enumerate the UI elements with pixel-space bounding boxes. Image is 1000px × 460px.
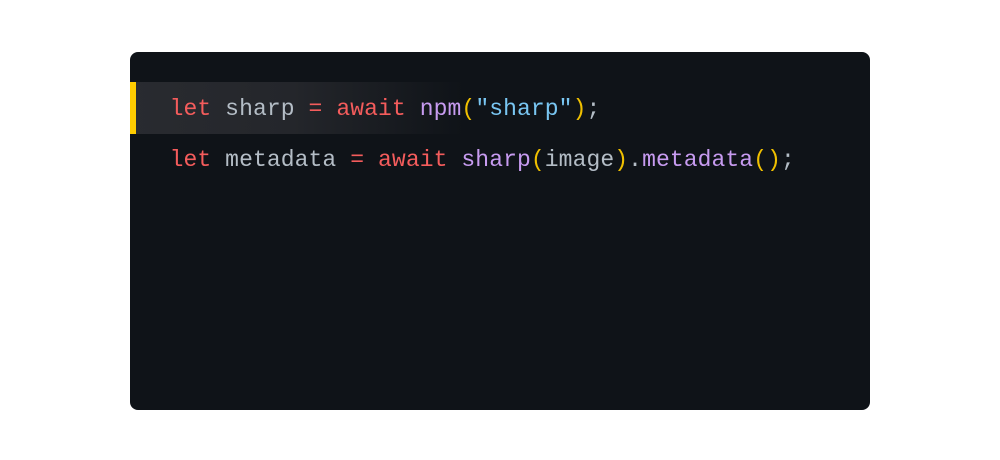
code line 2: let metadata = await sharp(image).metadata(); xyxy=(170,147,795,173)
panel: code window xyxy=(130,52,870,410)
highlight marker bar xyxy=(130,82,136,134)
highlighted line background xyxy=(130,82,870,134)
code line 1: let sharp = await npm("sharp"); xyxy=(170,96,600,122)
